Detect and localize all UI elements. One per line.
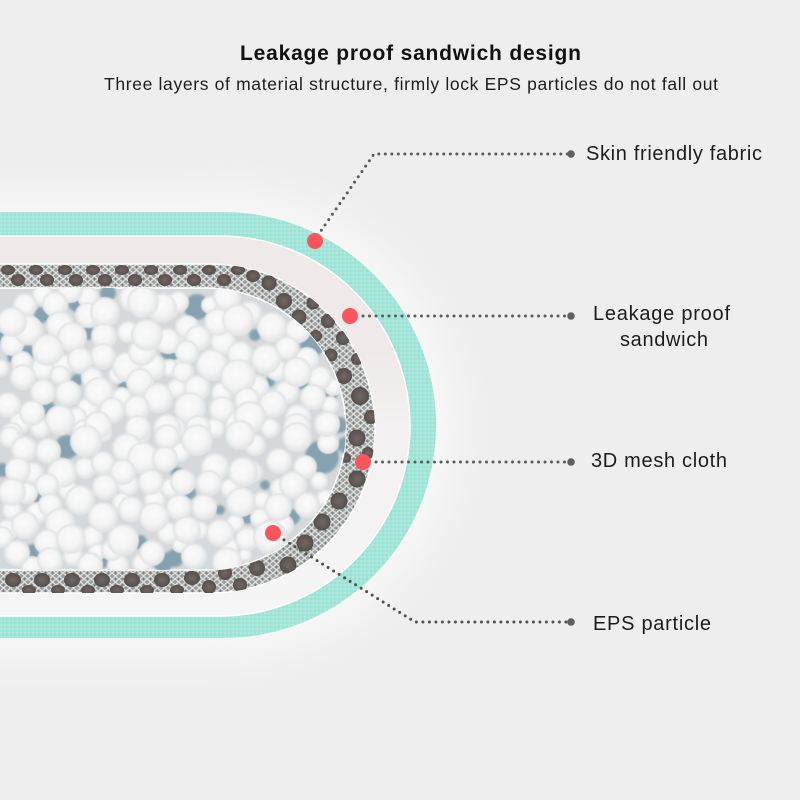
label: Leakage proof (593, 303, 730, 325)
marker (342, 308, 358, 324)
marker (355, 454, 371, 470)
title: Leakage proof sandwich design (240, 42, 581, 65)
end dot (567, 458, 575, 466)
end dot (567, 618, 575, 626)
callout: skin friendly fabric (307, 143, 762, 249)
leader line (314, 154, 570, 241)
leader line (363, 460, 570, 464)
layer: teal skin friendly fabric (0, 212, 436, 638)
leader line (273, 533, 570, 622)
label: EPS particle (593, 613, 711, 635)
label: 3D mesh cloth (591, 450, 727, 472)
label: sandwich (620, 329, 708, 351)
callout: EPS particle (265, 525, 711, 635)
marker (307, 233, 323, 249)
marker (265, 525, 281, 541)
callout: 3D mesh cloth (355, 450, 727, 472)
subtitle: Three layers of material structure, firmly lock EPS particles do not fall out (104, 74, 718, 94)
leader line (350, 314, 570, 318)
label: Skin friendly fabric (586, 143, 762, 165)
end dot (567, 312, 575, 320)
callout: leakage proof sandwich (342, 303, 730, 351)
layer: EPS particles (0, 278, 353, 577)
end dot (567, 150, 575, 158)
cross-section diagram (0, 212, 436, 638)
layer: leakage proof sandwich (0, 236, 410, 616)
layer: 3D mesh cloth (0, 264, 378, 595)
